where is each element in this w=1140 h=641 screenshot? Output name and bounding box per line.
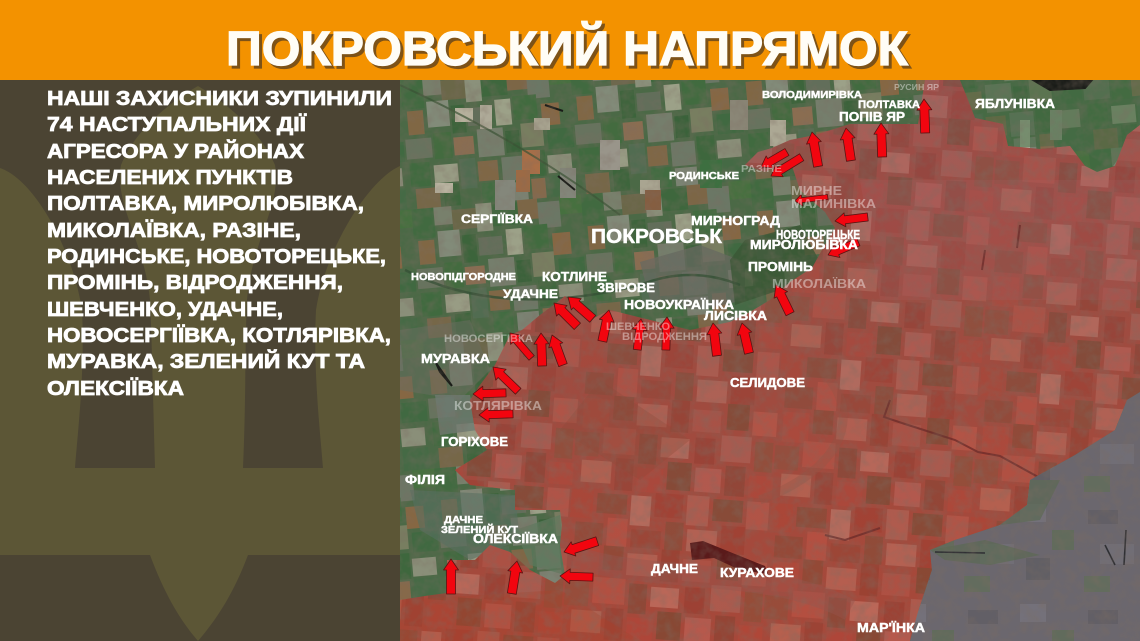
left panel with trident emblem (0, 80, 400, 641)
left panel text block: МИКОЛАЇВКА, РАЗІНЕ, (47, 219, 301, 242)
map: settlement labels: МАЛИНІВКА (791, 196, 877, 211)
map: settlement labels (405, 82, 1056, 635)
map: settlement labels: ОЛЕКСІЇВКА (473, 531, 559, 546)
map: settlement labels: ДАЧНЕ (444, 515, 483, 526)
left panel text block: РОДИНСЬКЕ, НОВОТОРЕЦЬКЕ, (47, 246, 386, 268)
Pokrovsk urban area (640, 245, 745, 310)
map: settlement labels: СЕЛИДОВЕ (730, 376, 805, 390)
map: settlement labels: МИРОЛЮБІВКА (750, 238, 858, 252)
map: settlement labels: ВОЛОДИМИРІВКА (762, 89, 862, 101)
map: settlement labels: МИКОЛАЇВКА (772, 276, 867, 291)
left panel text block: НОВОСЕРГІЇВКА, КОТЛЯРІВКА, (47, 324, 391, 347)
left panel text block: 74 НАСТУПАЛЬНИХ ДІЇ (47, 113, 307, 136)
map: settlement labels: ЛИСІВКА (704, 308, 768, 323)
arrows: red attack directions (444, 99, 933, 595)
map: settlement labels: КУРАХОВЕ (720, 566, 794, 580)
map: settlement labels: НОВОПІДГОРОДНЕ (411, 271, 516, 283)
left panel text block: ПОЛТАВКА, МИРОЛЮБІВКА, (47, 193, 364, 215)
map: settlement labels: ФІЛІЯ (405, 473, 445, 487)
map: settlement labels: ЯБЛУНІВКА (975, 96, 1056, 111)
left panel text block: НАШІ ЗАХИСНИКИ ЗУПИНИЛИ (47, 88, 392, 110)
map: settlement labels: НОВОУКРАЇНКА (624, 297, 735, 312)
left panel text block: ОЛЕКСІЇВКА (47, 377, 184, 400)
map: settlement labels: ВІДРОДЖЕННЯ (622, 331, 707, 343)
map: settlement labels: СЕРГІЇВКА (461, 211, 533, 226)
map: settlement labels: РАЗІНЕ (741, 163, 782, 175)
map: settlement labels: НОВОТОРЕЦЬКЕ (776, 228, 860, 242)
left panel text block: МУРАВКА, ЗЕЛЕНИЙ КУТ ТА (47, 349, 365, 373)
map: settlement labels: ШЕВЧЕНКО (606, 321, 670, 333)
map panel (400, 80, 1140, 641)
header bar (0, 0, 1140, 80)
left panel text block: ШЕВЧЕНКО, УДАЧНЕ, (47, 299, 283, 321)
map: settlement labels: РУСИН ЯР (894, 82, 939, 92)
title: ПОКРОВСЬКИЙ НАПРЯМОК (226, 21, 909, 76)
map: settlement labels: ПОЛТАВКА (858, 99, 920, 111)
map: settlement labels: УДАЧНЕ (503, 287, 558, 301)
map: unoccipied green farmland (400, 80, 1140, 641)
map: settlement labels: ЗВІРОВЕ (597, 280, 655, 295)
map: settlement labels: РОДИНСЬКЕ (669, 170, 739, 182)
map: settlement labels: ПОПІВ ЯР (839, 109, 905, 124)
left panel text block (47, 88, 392, 400)
map: settlement labels: КОТЛИНЕ (542, 270, 607, 284)
map: settlement labels: КОТЛЯРІВКА (454, 398, 543, 413)
map: south-east grey area (900, 390, 1140, 641)
left panel text block: ПРОМІНЬ, ВІДРОДЖЕННЯ, (47, 272, 343, 294)
water bodies (436, 80, 1092, 386)
map: settlement labels: ЗЕЛЕНИЙ КУТ (441, 523, 519, 536)
left panel text block: АГРЕСОРА У РАЙОНАХ (47, 139, 305, 163)
Kurakhove reservoir (690, 541, 768, 574)
map: settlement labels: ДАЧНЕ (651, 562, 698, 576)
map: settlement labels: МУРАВКА (421, 351, 491, 366)
map: settlement labels: ПОКРОВСЬК (591, 226, 723, 248)
map: settlement labels: НОВОСЕРГІВКА (444, 333, 533, 345)
title: ПОКРОВСЬКИЙ НАПРЯМОК (229, 24, 912, 79)
map: settlement labels: ПРОМІНЬ (748, 259, 813, 274)
map: settlement labels: МИРНОГРАД (691, 214, 780, 228)
map: settlement labels: МАР'ЇНКА (857, 620, 925, 635)
map: settlement labels: ГОРІХОВЕ (441, 435, 508, 449)
left panel text block: НАСЕЛЕНИХ ПУНКТІВ (47, 167, 293, 189)
dry gullies (825, 225, 1040, 540)
map: occupied territory in red (400, 80, 1140, 641)
map: settlement labels: МИРНЕ (791, 183, 842, 198)
